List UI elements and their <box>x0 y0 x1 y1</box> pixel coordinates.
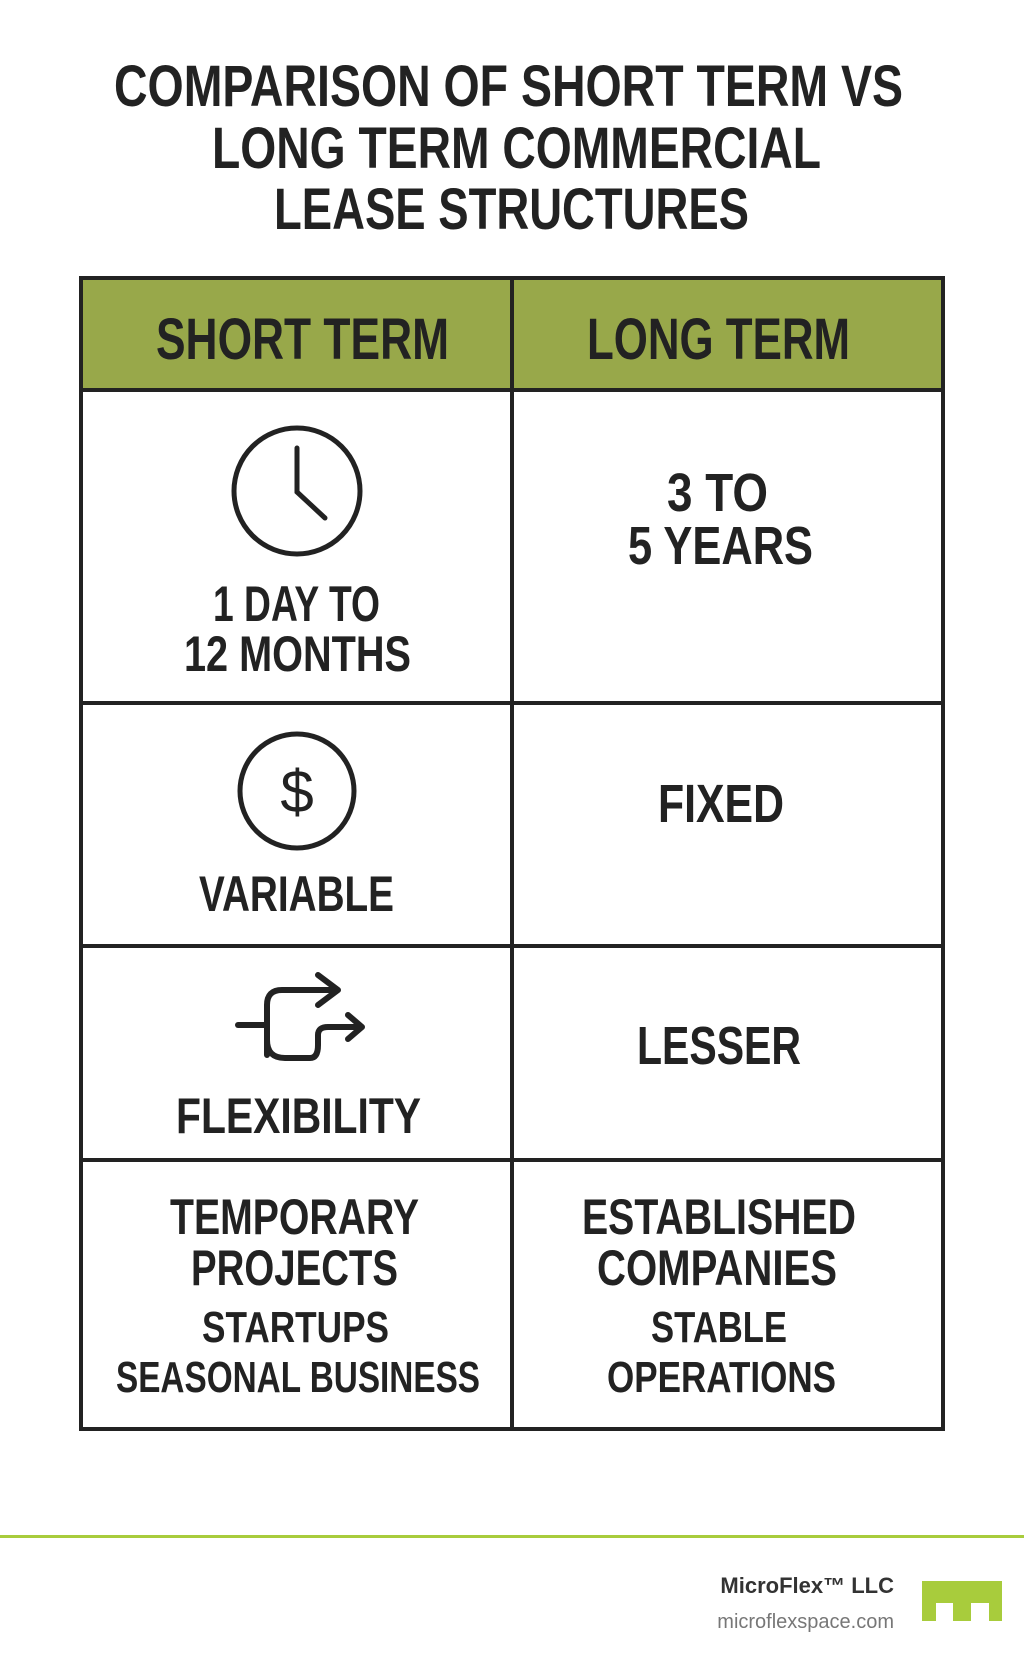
header row: LONG TERM <box>587 307 850 372</box>
comparison table <box>81 278 943 1429</box>
row: best for: PROJECTS <box>191 1240 398 1296</box>
title: LONG TERM COMMERCIAL <box>212 116 821 181</box>
row: best for: SEASONAL BUSINESS <box>116 1353 480 1402</box>
header row <box>81 278 943 390</box>
footer brand: MicroFlex™ LLC <box>720 1573 894 1598</box>
row: best for: ESTABLISHED <box>582 1189 856 1245</box>
row: duration: 3 TO <box>667 463 768 523</box>
row: flexibility: LESSER <box>637 1016 801 1076</box>
row: best for: STARTUPS <box>202 1303 389 1352</box>
title <box>114 54 903 242</box>
icon: logo <box>922 1581 1002 1621</box>
row: best for <box>116 1189 856 1402</box>
row: duration: 12 MONTHS <box>184 626 411 682</box>
row: duration <box>184 428 813 682</box>
row: flexibility <box>176 975 801 1144</box>
row: best for: OPERATIONS <box>607 1353 836 1402</box>
footer brand <box>717 1573 1002 1633</box>
row: duration: 5 YEARS <box>628 516 813 576</box>
icon: dollar: $ <box>280 758 314 825</box>
row: rent: FIXED <box>658 774 784 834</box>
icon: clock <box>234 428 360 554</box>
row: best for: COMPANIES <box>597 1240 837 1296</box>
row: best for: TEMPORARY <box>170 1189 419 1245</box>
row: rent <box>199 734 784 922</box>
row: duration: 1 DAY TO <box>213 576 380 632</box>
icon: branching arrows <box>238 975 362 1058</box>
title: LEASE STRUCTURES <box>274 177 749 242</box>
row: rent: VARIABLE <box>199 866 394 922</box>
row: best for: STABLE <box>651 1303 787 1352</box>
footer brand: microflexspace.com <box>717 1611 894 1633</box>
header row: SHORT TERM <box>156 307 449 372</box>
icon: dollar <box>240 734 354 848</box>
row: flexibility: FLEXIBILITY <box>176 1088 421 1144</box>
